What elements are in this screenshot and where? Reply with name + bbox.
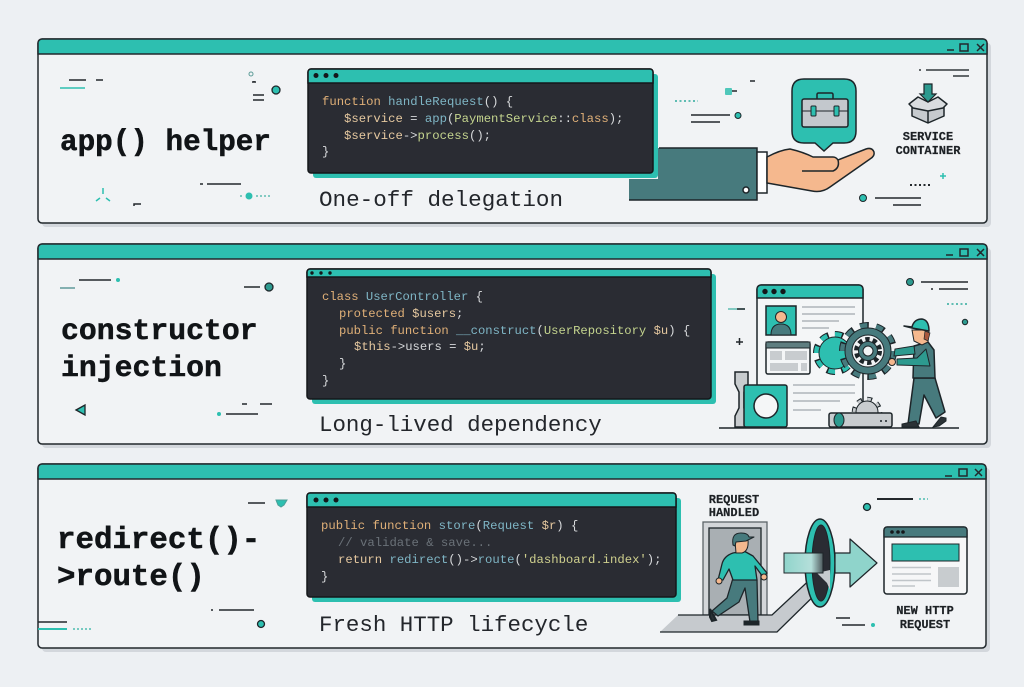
label: service container: CONTAINER	[896, 144, 961, 158]
code window: store	[307, 493, 681, 602]
label: new http request: REQUEST	[900, 618, 950, 632]
code window: UserController: }	[339, 357, 346, 371]
code window: UserController: public function __construct(UserRepository $u) {	[339, 324, 690, 338]
panel: app() helper	[38, 39, 991, 227]
decorative marks	[60, 70, 969, 206]
code window: handleRequest	[308, 69, 658, 178]
code window: UserController: protected $users;	[339, 307, 463, 321]
code window: handleRequest: }	[322, 145, 329, 159]
icon: new page window	[884, 527, 967, 594]
heading: constructor injection: constructor	[61, 314, 258, 348]
illustration: person walking through door onto path	[660, 522, 827, 632]
code window: handleRequest: $service->process();	[344, 129, 491, 143]
label: request handled: REQUEST	[709, 493, 759, 507]
heading: app() helper: app() helper	[60, 126, 271, 159]
code window: handleRequest: $service = app(PaymentService::class);	[344, 112, 623, 126]
code window: UserController: class UserController {	[322, 290, 483, 304]
panel: constructor injection	[38, 244, 991, 448]
code window: store: return redirect()->route('dashboard.index');	[338, 553, 662, 567]
code window: UserController: }	[322, 374, 329, 388]
label: new http request: NEW HTTP	[896, 604, 954, 618]
heading: redirect()->route(): redirect()-	[57, 523, 260, 558]
icon: service container box	[909, 84, 947, 123]
code window: store: }	[321, 570, 328, 584]
code window: UserController: $this->users = $u;	[354, 340, 486, 354]
label: service container: SERVICE	[903, 130, 953, 144]
code window: store: // validate & save...	[338, 536, 492, 550]
decorative marks	[60, 278, 969, 416]
decorative marks	[38, 499, 928, 629]
heading: constructor injection: injection	[61, 351, 222, 385]
code window: handleRequest: function handleRequest() {	[322, 95, 513, 109]
caption: Fresh HTTP lifecycle: Fresh HTTP lifecycle	[319, 612, 588, 638]
code window: store: public function store(Request $r) {	[321, 519, 578, 533]
panel: redirect route	[38, 464, 990, 652]
caption: One-off delegation: One-off delegation	[319, 187, 563, 213]
illustration: worker turning gears in a web page	[719, 285, 959, 428]
label: request handled: HANDLED	[709, 506, 759, 520]
caption: Long-lived dependency: Long-lived dependency	[319, 412, 602, 438]
icon: hand offering briefcase	[629, 79, 874, 200]
illustration: arrow through portal	[784, 519, 877, 607]
heading: redirect()->route(): >route()	[57, 560, 205, 595]
code window: UserController	[307, 269, 716, 404]
